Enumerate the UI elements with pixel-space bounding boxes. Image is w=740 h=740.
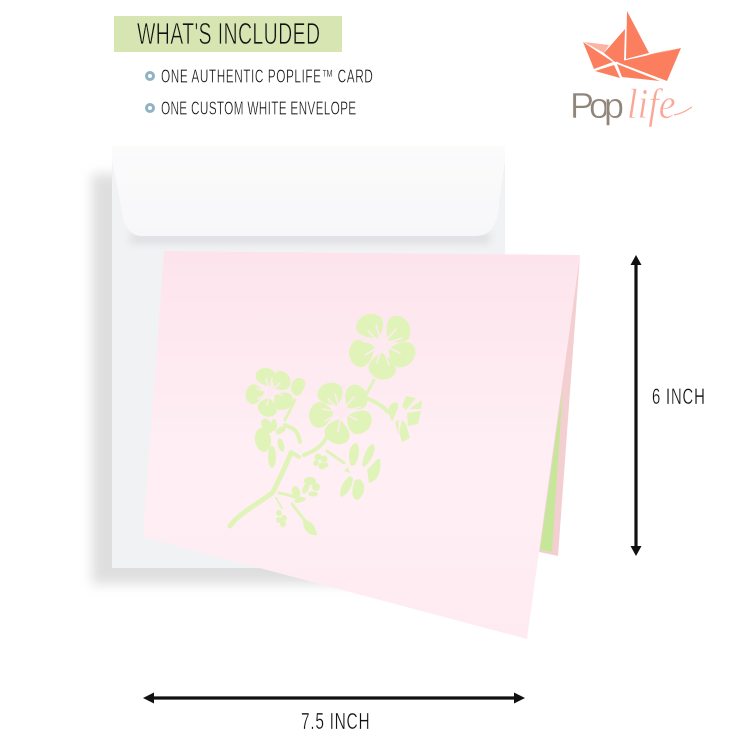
envelope: [92, 146, 505, 584]
bud cluster: centre: [313, 454, 328, 470]
card front: [143, 251, 580, 639]
flower: upper left: [243, 366, 296, 421]
dimension: width arrow: [143, 692, 525, 704]
wordmark: life: [627, 80, 676, 127]
dimension label: 7.5 inch: 7.5 INCH: [301, 709, 370, 735]
bud: bottom left: [276, 510, 287, 527]
cherry blossom cut-out: [230, 312, 422, 535]
card back: [539, 255, 580, 556]
heading: what's included: WHAT'S INCLUDED: [137, 18, 320, 51]
envelope flap: [112, 146, 505, 236]
icon: origami boat: [583, 11, 681, 81]
flower: centre: [306, 381, 377, 449]
wordmark: [570, 80, 692, 127]
greeting card: [143, 251, 580, 639]
flower: right: [388, 396, 422, 442]
bullet item: envelope: ONE CUSTOM WHITE ENVELOPE: [161, 99, 356, 119]
dimension: height arrow: [630, 255, 642, 556]
bullet item: card: ONE AUTHENTIC POPLIFE™ CARD: [161, 67, 373, 87]
dimension label: 6 inch: 6 INCH: [652, 385, 705, 410]
envelope body: [112, 146, 505, 568]
card inner green: [540, 387, 563, 552]
bud: bottom right: [303, 520, 317, 535]
bud cluster: lower: [290, 477, 320, 504]
flower stamens: [257, 323, 402, 432]
envelope shadow: [92, 174, 492, 584]
branch: [230, 380, 388, 526]
bud: upper: [291, 378, 305, 396]
flower: lower right: [340, 443, 381, 500]
logo: poplife: [570, 11, 692, 127]
wordmark: Pop: [570, 85, 624, 126]
flower: lower left: [253, 417, 288, 468]
list of included items: [146, 67, 373, 119]
flower: top: [348, 312, 421, 384]
